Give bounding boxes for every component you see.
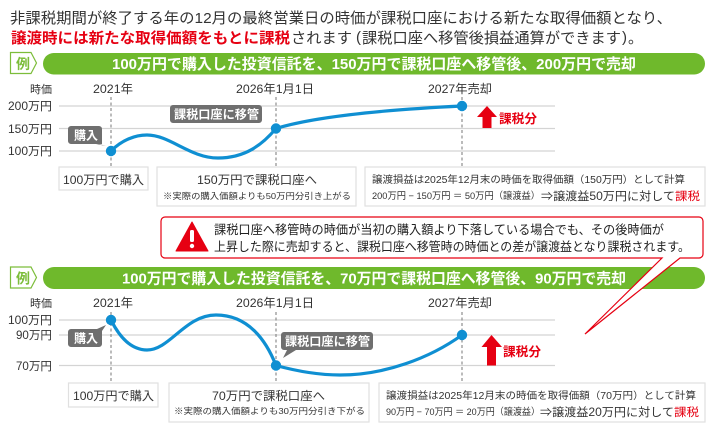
example 2 badge: 例: [16, 270, 30, 286]
chart 2: 2026年1月1日: [236, 296, 314, 310]
callout: warning: 上昇した際に売却すると、課税口座へ移管時の時価との差が譲渡益となり課税されます。: [214, 239, 690, 254]
tag: transfer to taxable account: [281, 332, 373, 358]
note box: purchase 2: 100万円で購入: [73, 389, 154, 403]
example 2 heading bar: 100万円で購入した投資信託を、70万円で課税口座へ移管後、90万円で売却: [122, 270, 626, 288]
note box: transfer 1: 150万円で課税口座へ: [197, 173, 317, 187]
intro text: 非課税期間が終了する年の12月の最終営業日の時価が課税口座における新たな取得価額となり、: [10, 10, 672, 27]
taxable arrow: [477, 106, 537, 128]
note box: purchase 2: [68, 383, 158, 407]
example 2 badge: [10, 267, 36, 288]
chart 1: 2021年: [93, 82, 133, 96]
note box: calculation 1: 課税: [675, 189, 701, 203]
note box: calculation 2: 譲渡損益は2025年12月末の時価を取得価額（70万円）として計算: [386, 389, 696, 402]
taxable arrow: [482, 335, 541, 366]
tag: transfer to taxable account: 課税口座に移管: [285, 334, 370, 348]
chart 2: 時価: [30, 297, 52, 310]
tag: purchase: [68, 126, 106, 146]
taxable arrow: 課税分: [503, 344, 541, 359]
note box: calculation 1: 譲渡損益は2025年12月末の時価を取得価額（150万円）として計算: [372, 173, 685, 186]
note box: calculation 1: 200万円 − 150万円 ＝ 50万円（譲渡益）: [372, 190, 540, 202]
tag: transfer to taxable account: 課税口座に移管: [174, 106, 259, 122]
note box: transfer 2: [169, 383, 369, 422]
note box: transfer 2: 70万円で課税口座へ: [212, 389, 325, 403]
intro text: 譲渡時には新たな取得価額をもとに課税: [11, 29, 290, 47]
note box: calculation 2: 課税: [674, 405, 700, 419]
icon: warning triangle: [176, 222, 208, 251]
chart 2: 2027年売却: [428, 295, 492, 310]
intro text: 。: [628, 30, 643, 47]
note box: transfer 1: [157, 167, 356, 206]
chart 1: 150万円: [8, 124, 52, 136]
example 2 heading bar: [43, 267, 705, 289]
callout: warning: [161, 217, 703, 334]
note box: transfer 2: ※実際の購入価額よりも30万円分引き下がる: [174, 406, 365, 416]
chart 2: 90万円: [16, 330, 52, 342]
intro text: されます: [291, 30, 352, 47]
chart 1: 時価: [30, 83, 52, 96]
tag: purchase: 購入: [74, 128, 98, 142]
intro text: 課税口座へ移管後損益通算ができます: [362, 29, 621, 47]
intro text: (: [356, 29, 361, 46]
chart 1: 2026年1月1日: [236, 82, 314, 96]
chart 1: 100万円: [8, 146, 52, 158]
example 1 badge: [10, 52, 36, 74]
note box: calculation 2: ⇒譲渡益20万円に対して: [540, 405, 674, 419]
taxable arrow: 課税分: [499, 111, 537, 126]
note box: transfer 1: ※実際の購入価額よりも50万円分引き上がる: [163, 191, 351, 201]
chart 2: 100万円: [8, 315, 52, 327]
note box: purchase 1: 100万円で購入: [63, 173, 144, 187]
chart 1: 200万円: [8, 101, 52, 113]
note box: calculation 1: ⇒譲渡益50万円に対して: [541, 189, 675, 203]
chart 2: 70万円: [16, 361, 52, 373]
note box: purchase 1: [59, 167, 148, 190]
example 1 badge: 例: [16, 56, 30, 72]
tag: transfer to taxable account: [170, 105, 270, 123]
intro text: [10, 10, 672, 47]
intro text: ): [622, 29, 627, 46]
chart 1: 2027年売却: [428, 81, 492, 96]
example 1 heading bar: [43, 53, 705, 74]
tag: purchase: 購入: [74, 330, 98, 346]
chart 2: [8, 295, 555, 382]
note box: calculation 2: 90万円 − 70万円 ＝ 20万円（譲渡益）: [386, 406, 540, 418]
chart 1: [8, 81, 555, 167]
chart 2: 2021年: [93, 296, 133, 310]
callout: warning: 課税口座へ移管時の時価が当初の購入額より下落している場合でも、その後時価が: [214, 222, 664, 237]
note box: calculation 2: [379, 383, 705, 422]
tag: purchase: [68, 325, 106, 347]
example 1 heading bar: 100万円で購入した投資信託を、150万円で課税口座へ移管後、200万円で売却: [112, 55, 636, 73]
note box: calculation 1: [365, 167, 705, 206]
